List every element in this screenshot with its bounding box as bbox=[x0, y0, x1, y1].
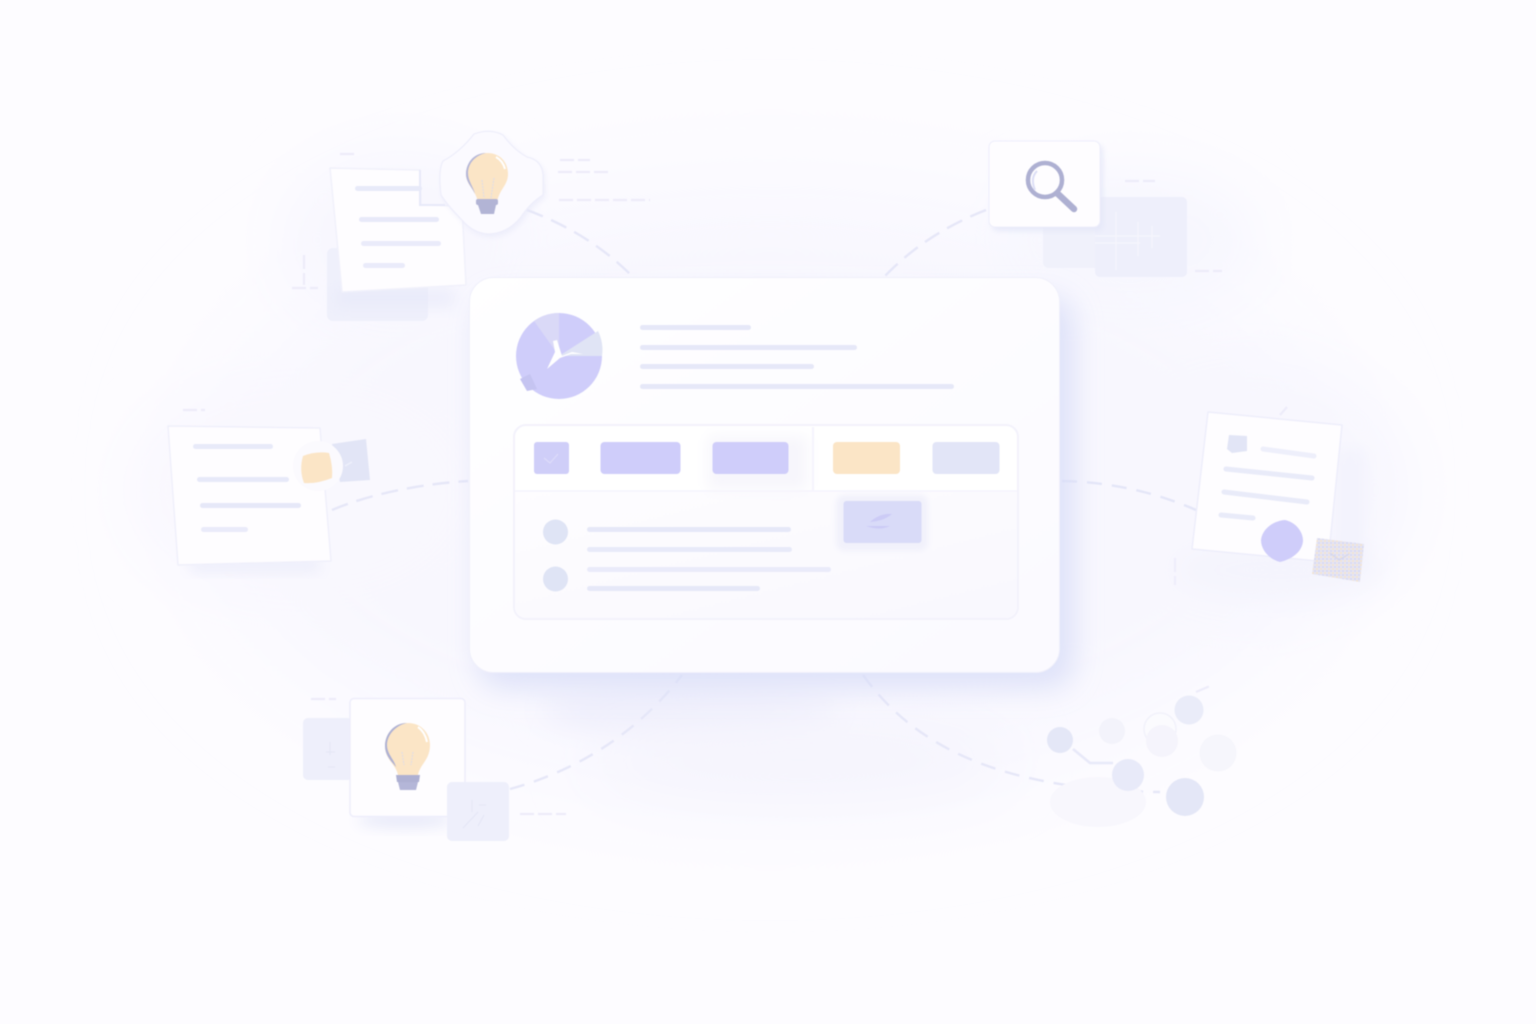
front tile bbox=[447, 782, 509, 841]
icon: lightbulb bbox=[385, 723, 430, 790]
tab: check tile bbox=[534, 442, 569, 474]
connector: left document to main card bbox=[332, 481, 468, 510]
connector: magnifier to main card bbox=[885, 210, 986, 276]
tab: purple block one bbox=[600, 442, 680, 474]
pie chart bbox=[516, 313, 602, 399]
list row two bbox=[543, 566, 831, 592]
main dashboard card bbox=[470, 278, 1074, 688]
grid tile bbox=[1095, 197, 1187, 277]
back tile bbox=[303, 718, 353, 780]
inner table panel bbox=[514, 425, 1018, 619]
connector: main card to network nodes bbox=[863, 675, 1160, 792]
button tile bbox=[836, 495, 928, 551]
decorative dash marks bbox=[183, 154, 1287, 814]
tab: amber block bbox=[833, 442, 900, 474]
left document cluster bbox=[168, 426, 370, 572]
header text lines bbox=[640, 325, 954, 389]
grey tile bbox=[332, 439, 370, 482]
lightbulb badge bbox=[440, 131, 545, 237]
list row one bbox=[543, 520, 792, 552]
bottom left lightbulb cluster bbox=[303, 698, 509, 841]
magnifier card bbox=[989, 141, 1103, 231]
network nodes bbox=[1047, 696, 1236, 827]
tab: purple block two bbox=[712, 442, 788, 474]
connector: right document to main card bbox=[1062, 481, 1196, 510]
tab: pale block bbox=[932, 442, 1000, 474]
right document cluster bbox=[1175, 412, 1385, 596]
purple seal bbox=[1261, 520, 1303, 562]
icon: magnifier bbox=[1028, 163, 1074, 209]
document sheet bbox=[1192, 412, 1342, 562]
connector: bottom left tile to main card bbox=[510, 675, 682, 789]
bulb card bbox=[350, 698, 465, 816]
document sheet bbox=[168, 426, 331, 565]
connector: lightbulb to main card bbox=[527, 210, 632, 276]
document sheet bbox=[330, 168, 466, 292]
amber note bbox=[293, 441, 343, 491]
icon: lightbulb bbox=[466, 153, 508, 214]
top left document cluster bbox=[327, 168, 466, 321]
speckled envelope tile bbox=[1312, 538, 1364, 582]
top right magnifier cluster bbox=[989, 141, 1187, 277]
